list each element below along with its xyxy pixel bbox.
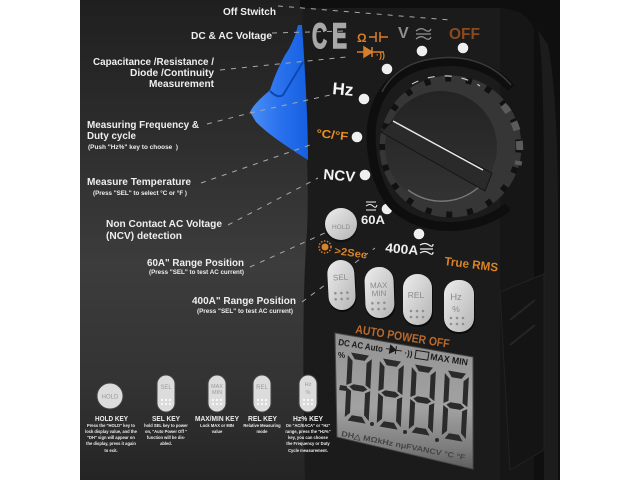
callout: non contact voltage [106, 218, 222, 242]
callout: capacitance, resistance, diode, continuity: Measurement [149, 78, 214, 90]
callout: off switch: Off Stwitch [223, 7, 276, 18]
off selector label: OFF [449, 26, 480, 43]
callout: capacitance, resistance, diode, continuity [93, 56, 214, 90]
callout: DC and AC voltage: DC & AC Voltage [191, 31, 272, 42]
callout: 400A range position [192, 295, 296, 315]
callout: 60A range position [147, 257, 244, 276]
legend: hz% key: Hz% KEY [293, 414, 323, 423]
callout: measure temperature [87, 176, 191, 197]
LCD display: % [338, 351, 345, 360]
legend: rel key: REL [256, 385, 268, 391]
temperature selector label: °C/°F [316, 128, 349, 143]
button: REL [403, 274, 433, 327]
legend: hold key: HOLD KEY [95, 414, 128, 423]
NCV selector label: NCV [323, 167, 356, 186]
400A selector label: 400A [385, 240, 420, 258]
legend: rel key [243, 375, 281, 434]
rotary dial [371, 58, 522, 226]
callout: measure temperature: (Press "SEL" to select °C or °F ) [93, 189, 187, 197]
callout: capacitance, resistance, diode, continuity: Diode /Continuity [130, 67, 214, 79]
legend: sel key: SEL KEY [152, 414, 180, 423]
button: MAX MIN [364, 266, 396, 320]
callout: frequency and duty cycle: (Push "Hz%" key to choose ) [88, 144, 178, 151]
callout: 60A range position: 60A" Range Position [147, 257, 244, 269]
legend: rel key: Relative Measuring [243, 423, 281, 428]
legend: sel key: hold SEL key to power [144, 423, 188, 428]
legend: hz% key: Cycle measurement. [288, 448, 328, 453]
legend: max/min key: MAX/MIN KEY [195, 414, 239, 423]
legend: max/min key: MIN [212, 390, 222, 396]
button: Hz percent: Hz [450, 292, 462, 303]
resistance, capacitance, diode and continuity symbols [357, 31, 388, 60]
selector dots [352, 43, 468, 239]
60A selector label [361, 202, 385, 227]
legend: max/min key [195, 375, 239, 434]
legend: hold key: Press the "HOLD" key to [87, 423, 136, 428]
callout: 60A range position: (Press "SEL" to test AC current) [149, 269, 244, 276]
legend: sel key: function will be dis- [147, 435, 186, 440]
legend: hold key: to exit. [104, 448, 118, 453]
auto power off label: AUTO POWER OFF [355, 322, 451, 351]
callout: 400A range position: (Press "SEL" to test AC current) [197, 308, 293, 315]
legend: hz% key: On "AC/EACA" or "Hz" [286, 423, 330, 428]
dashed leader lines [201, 6, 450, 302]
legend: sel key: SEL [160, 385, 172, 391]
button: REL: REL [408, 290, 425, 300]
true RMS label: True RMS [444, 254, 499, 275]
legend: sel key [144, 375, 188, 446]
legend: hold key: "DH" sign will appear on [87, 435, 135, 440]
legend: max/min key: value [212, 429, 223, 434]
callout: frequency and duty cycle: Measuring Frequency & [87, 119, 199, 131]
button: MAX MIN: MAX [370, 281, 388, 290]
callout: capacitance, resistance, diode, continuity: Capacitance /Resistance / [93, 56, 214, 68]
Hz selector label: Hz [332, 79, 354, 100]
legend: hz% key: key, you can choose [288, 435, 329, 440]
legend: hz% key: % [306, 390, 311, 396]
button: Hz percent: % [452, 304, 460, 314]
voltage selector label: V [398, 25, 409, 42]
LCD digits [339, 352, 469, 442]
backlight sun and 2 second label [319, 241, 368, 262]
legend: sel key: on, "Auto Power Off " [145, 429, 187, 434]
LCD top indicators: ·)) [404, 349, 413, 359]
legend: hold key: the display, press it again [86, 441, 136, 446]
button: MAX MIN: MIN [372, 289, 387, 298]
legend: hold key: lock display value, and the [85, 429, 138, 434]
legend: hz% key: Hz [305, 382, 312, 388]
LCD display [335, 333, 473, 469]
legend: hold key [85, 383, 138, 453]
legend: max/min key: MAX [211, 384, 223, 390]
legend: max/min key: Lock MAX or MIN [200, 423, 234, 428]
legend: rel key: mode [257, 429, 268, 434]
legend: hz% key: range, press the "Hz%" [285, 429, 331, 434]
blue side grip [250, 25, 308, 160]
CE mark: E [332, 17, 347, 56]
callout: non contact voltage: (NCV) detection [106, 230, 182, 242]
resistance, capacitance, diode and continuity symbols: ·)) [376, 50, 385, 60]
LCD top indicators: MAX MIN [430, 352, 469, 367]
callout: frequency and duty cycle [87, 119, 199, 151]
callout: frequency and duty cycle: Duty cycle [87, 130, 136, 142]
LCD top indicators [338, 337, 469, 367]
callout: non contact voltage: Non Contact AC Voltage [106, 218, 222, 230]
400A selector label [385, 240, 433, 258]
voltage selector label [398, 25, 431, 42]
LCD top indicators: DC AC Auto [338, 337, 384, 354]
backlight sun and 2 second label: >2Sec [334, 245, 368, 262]
legend: rel key: REL KEY [248, 414, 277, 423]
callout: measure temperature: Measure Temperature [87, 176, 191, 188]
multimeter body [300, 0, 560, 480]
legend: hold key: HOLD [102, 394, 119, 400]
60A selector label: 60A [361, 215, 385, 227]
resistance, capacitance, diode and continuity symbols: Ω [357, 31, 367, 45]
legend: hz% key [285, 375, 331, 453]
hold button: HOLD [332, 224, 350, 231]
hold button [324, 208, 358, 242]
button: Hz percent [444, 280, 475, 334]
button: SEL [327, 259, 357, 313]
callout: 400A range position: 400A" Range Position [192, 295, 296, 307]
CE mark: C [312, 17, 327, 56]
dark background panel [80, 0, 560, 480]
legend: sel key: abled. [160, 441, 172, 446]
legend: hz% key: the Frequency or Duty [286, 441, 330, 446]
LCD bottom indicators: DH△ ΜΩkHz nμFVANCV °C °F [341, 429, 467, 462]
button: SEL: SEL [333, 273, 349, 282]
